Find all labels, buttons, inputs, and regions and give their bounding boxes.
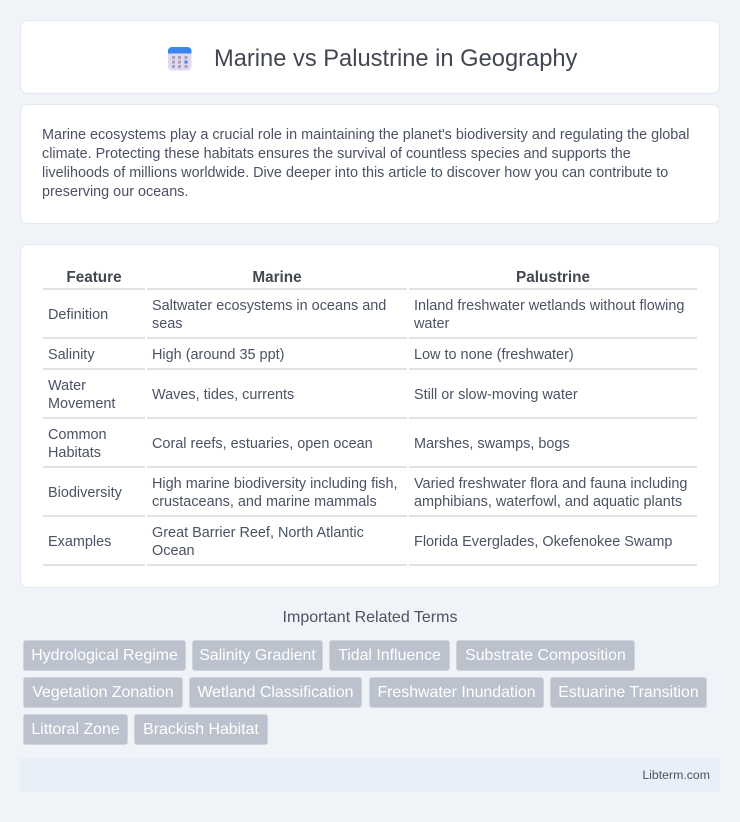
comparison table card bbox=[20, 244, 720, 588]
tag bbox=[189, 677, 362, 708]
row: Examples: Great Barrier Reef, North Atlantic bbox=[152, 525, 364, 541]
related terms heading: Important Related Terms bbox=[283, 609, 457, 626]
table header: Palustrine: Palustrine bbox=[516, 269, 590, 286]
row: Biodiversity bbox=[48, 476, 687, 510]
row: Common Habitats bbox=[48, 427, 570, 461]
icon: calendar bbox=[168, 47, 192, 70]
row: Definition: Definition bbox=[48, 307, 108, 323]
row: Biodiversity: crustaceans, and marine mammals bbox=[152, 494, 377, 510]
tag bbox=[456, 640, 635, 671]
row: Salinity: High (around 35 ppt) bbox=[152, 347, 284, 363]
intro paragraph bbox=[42, 127, 689, 200]
tag: Wetland Classification bbox=[197, 684, 354, 701]
intro paragraph: Marine ecosystems play a crucial role in maintaining the planet's biodiversity and regulating the global bbox=[42, 127, 689, 143]
row: Biodiversity: High marine biodiversity including fish, bbox=[152, 476, 398, 492]
tag: Brackish Habitat bbox=[143, 721, 259, 738]
tag: Freshwater Inundation bbox=[377, 684, 536, 701]
intro text card bbox=[20, 104, 720, 224]
tag bbox=[192, 640, 323, 671]
row: Common Habitats: Common bbox=[48, 427, 107, 443]
footer credit: Libterm.com bbox=[642, 768, 710, 782]
tag bbox=[23, 640, 186, 671]
row: Definition: Inland freshwater wetlands without flowing bbox=[414, 298, 684, 314]
header card bbox=[20, 20, 720, 94]
row: Common Habitats: Coral reefs, estuaries, open ocean bbox=[152, 436, 373, 452]
row: Examples bbox=[48, 525, 672, 559]
tag bbox=[23, 677, 183, 708]
table header: Marine: Marine bbox=[252, 269, 302, 286]
row: Examples: Examples bbox=[48, 534, 111, 550]
intro paragraph: livelihoods of millions worldwide. Dive deeper into this article to discover how you can contribute to bbox=[42, 165, 668, 181]
tag: Hydrological Regime bbox=[31, 647, 178, 664]
row: Examples: Ocean bbox=[152, 543, 195, 559]
row: Water Movement bbox=[48, 378, 578, 412]
intro paragraph: preserving our oceans. bbox=[42, 184, 188, 200]
row: Water Movement: Still or slow-moving water bbox=[414, 387, 578, 403]
row: Biodiversity: amphibians, waterfowl, and aquatic plants bbox=[414, 494, 682, 510]
row: Definition: water bbox=[414, 316, 449, 332]
row: Biodiversity: Varied freshwater flora and fauna including bbox=[414, 476, 687, 492]
tag: Substrate Composition bbox=[465, 647, 626, 664]
tag: Estuarine Transition bbox=[558, 684, 699, 701]
tag bbox=[23, 714, 128, 745]
row: Definition bbox=[48, 298, 684, 332]
row: Definition: seas bbox=[152, 316, 182, 332]
tag bbox=[134, 714, 268, 745]
row: Salinity: Low to none (freshwater) bbox=[414, 347, 574, 363]
row: Salinity: Salinity bbox=[48, 347, 95, 363]
table header: Feature: Feature bbox=[66, 269, 122, 286]
tag: Vegetation Zonation bbox=[32, 684, 174, 701]
row: Examples: Florida Everglades, Okefenokee Swamp bbox=[414, 534, 672, 550]
tag: Littoral Zone bbox=[31, 721, 120, 738]
related term tags bbox=[23, 640, 707, 745]
intro paragraph: climate. Protecting these habitats ensures the survival of countless species and supports the bbox=[42, 146, 631, 162]
row: Salinity bbox=[48, 347, 574, 363]
row: Common Habitats: Marshes, swamps, bogs bbox=[414, 436, 570, 452]
footer bar bbox=[20, 758, 720, 792]
row: Common Habitats: Habitats bbox=[48, 445, 101, 461]
tag: Tidal Influence bbox=[338, 647, 441, 664]
row: Water Movement: Movement bbox=[48, 396, 115, 412]
tag bbox=[329, 640, 450, 671]
row: Definition: Saltwater ecosystems in oceans and bbox=[152, 298, 386, 314]
tag: Salinity Gradient bbox=[199, 647, 316, 664]
tag bbox=[550, 677, 707, 708]
title: Marine vs Palustrine in Geography bbox=[214, 46, 577, 72]
tag bbox=[369, 677, 544, 708]
row: Water Movement: Waves, tides, currents bbox=[152, 387, 294, 403]
row: Biodiversity: Biodiversity bbox=[48, 485, 122, 501]
row: Water Movement: Water bbox=[48, 378, 86, 394]
